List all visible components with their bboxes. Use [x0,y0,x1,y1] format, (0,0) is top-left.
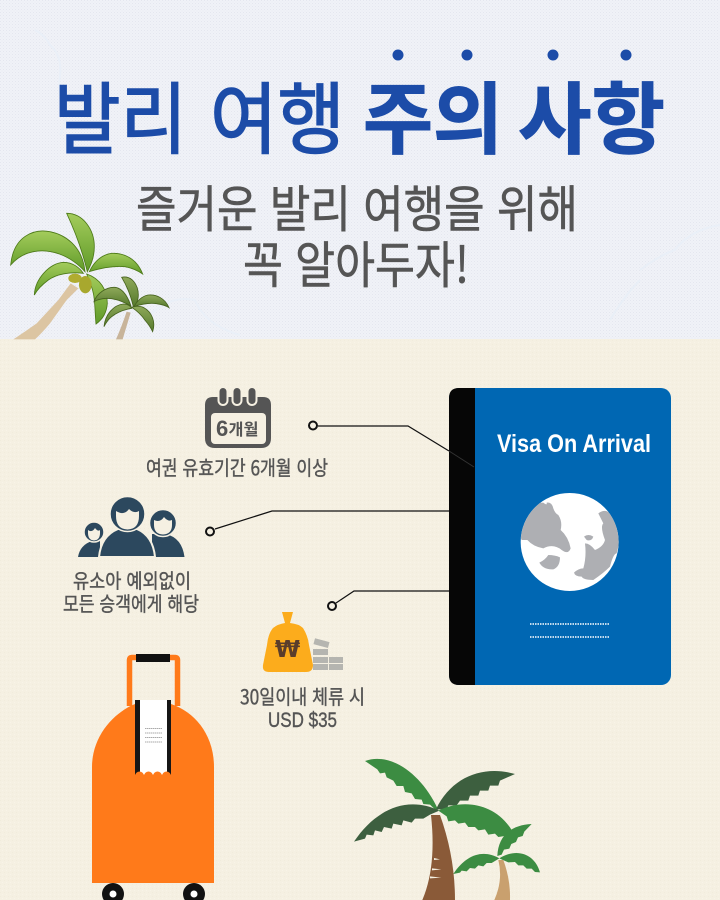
connector lines [206,422,449,610]
icon: passengers [78,496,184,557]
icon: calendar 6 months [205,387,271,448]
illustration: green palms [354,759,540,900]
icon: suitcase [92,654,214,900]
dotted lines [530,624,609,637]
text: visa fee: 30일이내 체류 시 [240,681,365,710]
text: passport validity: 여권 유효기간 6개월 이상 [146,452,328,481]
icon: passport [449,388,671,685]
icon: money bag and bars [263,612,343,672]
icon: money bag and bars: ₩ [275,637,301,663]
text: infants included [63,565,199,617]
text: visa fee [240,681,365,732]
emphasis dots [392,50,632,60]
text: infants included: 모든 승객에게 해당 [63,588,199,617]
title: 주의 [363,58,503,170]
passport title: Visa On Arrival [497,430,651,458]
panel: content background [0,339,720,900]
icon: calendar 6 months: 6 [216,416,228,441]
wheels [102,883,205,900]
text: visa fee: USD $35 [268,709,337,732]
subtitle [136,170,578,298]
subtitle: 즐거운 발리 여행을 위해 [136,170,578,242]
icon: calendar 6 months: 개월 [228,416,258,440]
subtitle: 꼭 알아두자! [243,226,469,298]
illustration: coconut palms [11,213,169,339]
panel: header background [0,0,720,339]
title [54,50,665,170]
faint clouds [35,30,720,335]
title: 여행 [210,58,345,170]
title: 사항 [518,58,665,170]
title: 발리 [54,58,187,170]
globe [517,493,622,591]
text: infants included: 유소아 예외없이 [73,565,191,594]
